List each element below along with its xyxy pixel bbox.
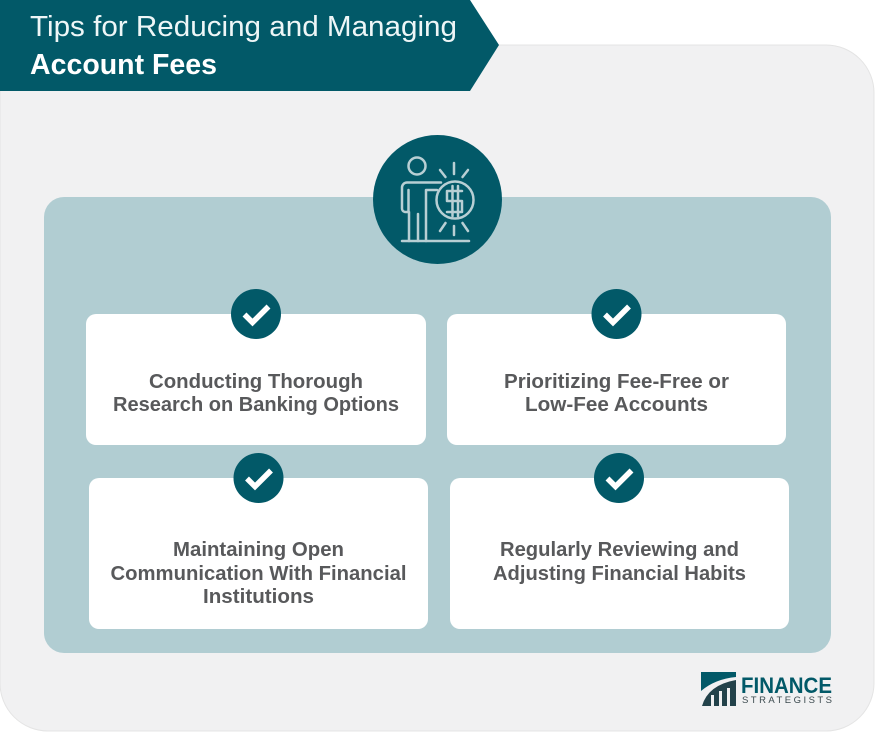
title banner (0, 0, 499, 91)
card: reviewing habits (450, 478, 789, 629)
card text: Conducting Thorough (149, 371, 363, 393)
logo: Finance Strategists (701, 672, 832, 706)
card: open communication (89, 478, 428, 629)
card text: Adjusting Financial Habits (493, 563, 746, 585)
logo wordmark: FINANCE (741, 673, 832, 698)
card text (113, 371, 399, 416)
card: fee-free accounts (447, 314, 786, 445)
check icon: research (231, 289, 281, 339)
check icon: open communication (234, 453, 284, 503)
card text: Regularly Reviewing and (500, 539, 739, 561)
card text (504, 371, 729, 416)
check icon: reviewing habits (594, 453, 644, 503)
card text: Low-Fee Accounts (525, 394, 708, 416)
title text line 2: Account Fees (30, 49, 217, 81)
card text: Maintaining Open (173, 539, 344, 561)
title text line 1: Tips for Reducing and Managing (30, 11, 457, 43)
card text (110, 539, 406, 608)
check icon: fee-free accounts (592, 289, 642, 339)
card text: Research on Banking Options (113, 394, 399, 416)
card text: Institutions (203, 586, 314, 608)
inner teal panel (44, 197, 831, 653)
card text: Prioritizing Fee-Free or (504, 371, 729, 393)
card text: Communication With Financial (110, 563, 406, 585)
logo tagline: STRATEGISTS (742, 695, 832, 706)
icon: person with dollar coin (373, 135, 502, 264)
card text (493, 539, 746, 585)
card: research (86, 314, 426, 445)
